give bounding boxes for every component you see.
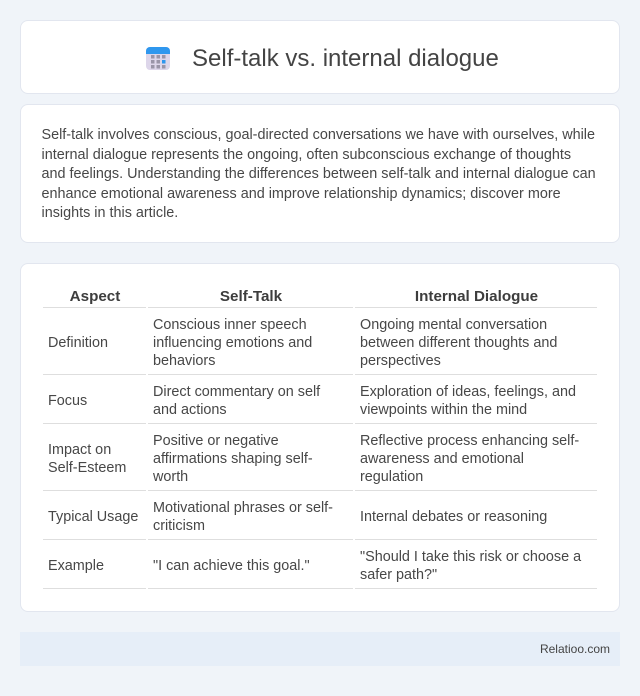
row: focus: Direct commentary on self xyxy=(153,384,320,400)
comparison table panel xyxy=(20,263,620,612)
table header: Self-Talk xyxy=(220,288,282,305)
row: focus: Focus xyxy=(48,393,87,409)
row: impact on self-esteem: awareness and emotional xyxy=(360,451,524,467)
row: definition xyxy=(48,317,557,369)
row: typical usage: Internal debates or reasoning xyxy=(360,509,547,525)
row: typical usage xyxy=(48,500,547,534)
row: typical usage: Motivational phrases or self- xyxy=(153,500,333,516)
row: example: safer path?" xyxy=(360,567,437,583)
title: Self-talk vs. internal dialogue xyxy=(192,45,499,72)
row: impact on self-esteem: Impact on xyxy=(48,442,111,458)
table header: Internal Dialogue xyxy=(415,288,538,305)
row: definition: Ongoing mental conversation xyxy=(360,317,547,333)
title card xyxy=(20,20,620,94)
row: definition: Definition xyxy=(48,335,108,351)
row: definition: perspectives xyxy=(360,353,441,369)
row: example: Example xyxy=(48,558,104,574)
row: definition: between different thoughts and xyxy=(360,335,557,351)
row: example xyxy=(48,549,582,583)
row: impact on self-esteem: Positive or negative xyxy=(153,433,279,449)
row: impact on self-esteem: Self-Esteem xyxy=(48,460,126,476)
footer text: Relatioo.com xyxy=(540,642,610,656)
row: impact on self-esteem: regulation xyxy=(360,469,423,485)
row: example: "I can achieve this goal." xyxy=(153,558,310,574)
row: typical usage: Typical Usage xyxy=(48,509,138,525)
row: impact on self-esteem: Reflective process enhancing self- xyxy=(360,433,579,449)
row: focus xyxy=(48,384,576,418)
intro text: Self-talk involves conscious, goal-directed conversations we have with ourselves, while xyxy=(42,127,595,143)
intro text: internal dialogue represents the ongoing, often subconscious exchange of thoughts xyxy=(42,147,571,163)
row: example: "Should I take this risk or choose a xyxy=(360,549,581,565)
intro text: and feelings. Understanding the differences between self-talk and internal dialogue can xyxy=(42,166,596,182)
row: focus: and actions xyxy=(153,402,227,418)
footer bar xyxy=(20,632,620,666)
row: focus: viewpoints within the mind xyxy=(360,402,527,418)
intro text xyxy=(42,127,596,221)
table header xyxy=(70,288,538,305)
row: impact on self-esteem xyxy=(48,433,579,485)
table header: Aspect xyxy=(70,288,120,305)
row: definition: influencing emotions and xyxy=(153,335,312,351)
intro panel xyxy=(20,104,620,243)
intro text: enhance emotional awareness and improve relationship dynamics; discover more xyxy=(42,186,561,202)
row: focus: Exploration of ideas, feelings, and xyxy=(360,384,576,400)
row: impact on self-esteem: worth xyxy=(153,469,188,485)
row: typical usage: criticism xyxy=(153,518,205,534)
intro text: insights in this article. xyxy=(42,205,178,221)
row: impact on self-esteem: affirmations shaping self- xyxy=(153,451,313,467)
icon: calendar xyxy=(146,47,170,70)
row: definition: Conscious inner speech xyxy=(153,317,307,333)
row: definition: behaviors xyxy=(153,353,215,369)
